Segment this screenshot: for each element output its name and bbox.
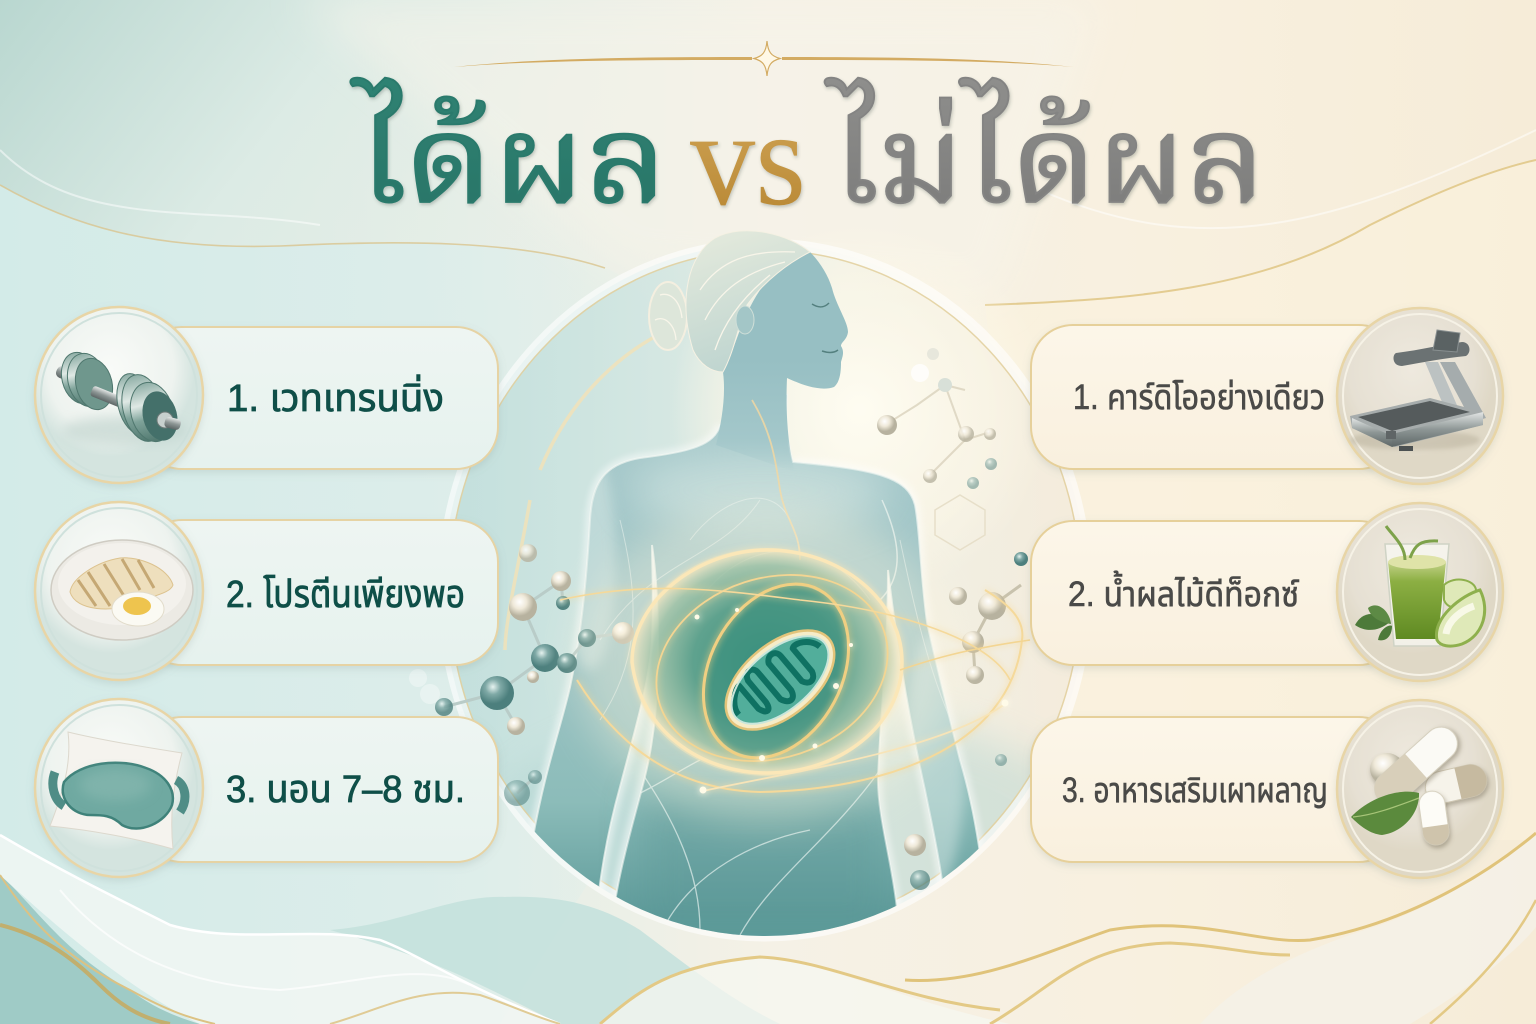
glowing energy core	[560, 502, 1030, 822]
label: 1. คาร์ดิโออย่างเดียว	[1073, 378, 1325, 417]
ear	[736, 306, 754, 334]
card 3: fat burner supplement	[1031, 700, 1503, 878]
icon: pillow and sleep mask	[50, 732, 185, 849]
label: 2. น้ำผลไม้ดีท็อกซ์	[1068, 570, 1300, 614]
hair	[686, 231, 810, 372]
title ornament: gold line and star	[454, 41, 1074, 76]
bottom flowing ribbons	[0, 833, 1536, 1024]
card 3: sleep	[35, 699, 498, 877]
icon: chicken and egg plate	[51, 540, 193, 640]
panel: effective methods	[35, 307, 498, 877]
woman silhouette	[520, 231, 990, 960]
torso and arms	[520, 395, 990, 960]
title: effective: ได้ผล	[350, 78, 668, 229]
label: 2. โปรตีนเพียงพอ	[226, 574, 465, 616]
panel: ineffective methods	[1031, 308, 1503, 878]
title	[350, 78, 1266, 234]
icon: dumbbell	[54, 348, 187, 446]
card 2: detox juice	[1031, 503, 1503, 681]
hair strands	[655, 252, 795, 350]
title: vs: vs	[690, 84, 806, 234]
card 1: cardio only	[1031, 308, 1503, 484]
molecules: right cluster	[877, 348, 1028, 890]
icon: capsules and leaf	[1351, 720, 1490, 847]
molecules: left cluster	[409, 544, 634, 806]
head and neck	[716, 252, 848, 472]
label: 3. นอน 7–8 ชม.	[226, 769, 465, 811]
title: not effective: ไม่ได้ผล	[824, 78, 1266, 229]
label: 1. เวทเทรนนิ่ง	[227, 374, 444, 420]
hair bun	[649, 282, 687, 350]
central glass sphere	[443, 220, 1090, 950]
icon: treadmill	[1350, 330, 1486, 451]
card 1: weight training	[35, 307, 498, 483]
label: 3. อาหารเสริมเผาผลาญ	[1062, 771, 1328, 810]
body shading	[564, 450, 965, 940]
icon: green juice and apple	[1355, 526, 1485, 646]
sparkles	[694, 608, 1008, 794]
eye and lips	[812, 303, 838, 352]
card 2: protein	[35, 502, 498, 680]
mitochondrion	[708, 611, 852, 749]
neck line	[752, 400, 800, 560]
